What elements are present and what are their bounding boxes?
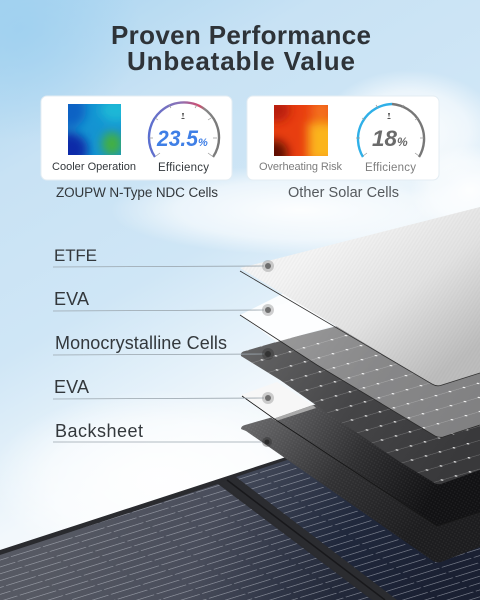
layer label: ETFE bbox=[53, 246, 274, 272]
layer label: EVA lower bbox=[53, 377, 274, 404]
panel: other cells bbox=[247, 96, 439, 180]
layer label: EVA lower: EVA bbox=[54, 377, 89, 397]
gauge: 18%: 18 bbox=[372, 126, 398, 151]
caption: other: Other Solar Cells bbox=[288, 185, 399, 201]
layer: backsheet bbox=[241, 360, 480, 562]
layer label: monocrystalline cells bbox=[53, 333, 274, 360]
gauge: 23.5%: % bbox=[198, 137, 208, 149]
layer label: ETFE: ETFE bbox=[54, 246, 97, 265]
layer: EVA upper bbox=[240, 250, 480, 437]
title bbox=[111, 20, 371, 76]
solar panel base bbox=[0, 400, 480, 600]
layer label: EVA bbox=[53, 289, 274, 316]
layer label: backsheet bbox=[53, 421, 272, 447]
title: Unbeatable Value bbox=[127, 46, 355, 76]
label: cooler operation: Cooler Operation bbox=[52, 161, 136, 173]
label: efficiency: Efficiency bbox=[158, 162, 209, 174]
gauge: 18% bbox=[356, 104, 424, 157]
layer: ETFE bbox=[240, 207, 480, 386]
layer label: EVA: EVA bbox=[54, 289, 89, 309]
panel seam bbox=[220, 477, 397, 600]
panel: ZOUPW cells bbox=[41, 92, 232, 180]
right panel face bbox=[236, 459, 480, 600]
thermal image: cool bbox=[68, 104, 121, 155]
caption: ZOUPW: ZOUPW N-Type NDC Cells bbox=[56, 185, 218, 200]
layer: EVA lower bbox=[241, 380, 480, 526]
layer label: monocrystalline cells: Monocrystalline Cells bbox=[55, 333, 227, 353]
gauge: 23.5%: 23.5 bbox=[156, 126, 199, 151]
layer: monocrystalline cells bbox=[241, 290, 480, 484]
left panel face bbox=[0, 484, 372, 600]
gauge: 23.5% bbox=[149, 102, 219, 157]
thermal image: hot bbox=[274, 105, 328, 156]
label: efficiency: Efficiency bbox=[365, 162, 416, 174]
title: Proven Performance bbox=[111, 20, 371, 50]
layer label: backsheet: Backsheet bbox=[55, 421, 143, 441]
label: overheating risk: Overheating Risk bbox=[259, 161, 342, 173]
gauge: 18%: % bbox=[397, 135, 408, 149]
